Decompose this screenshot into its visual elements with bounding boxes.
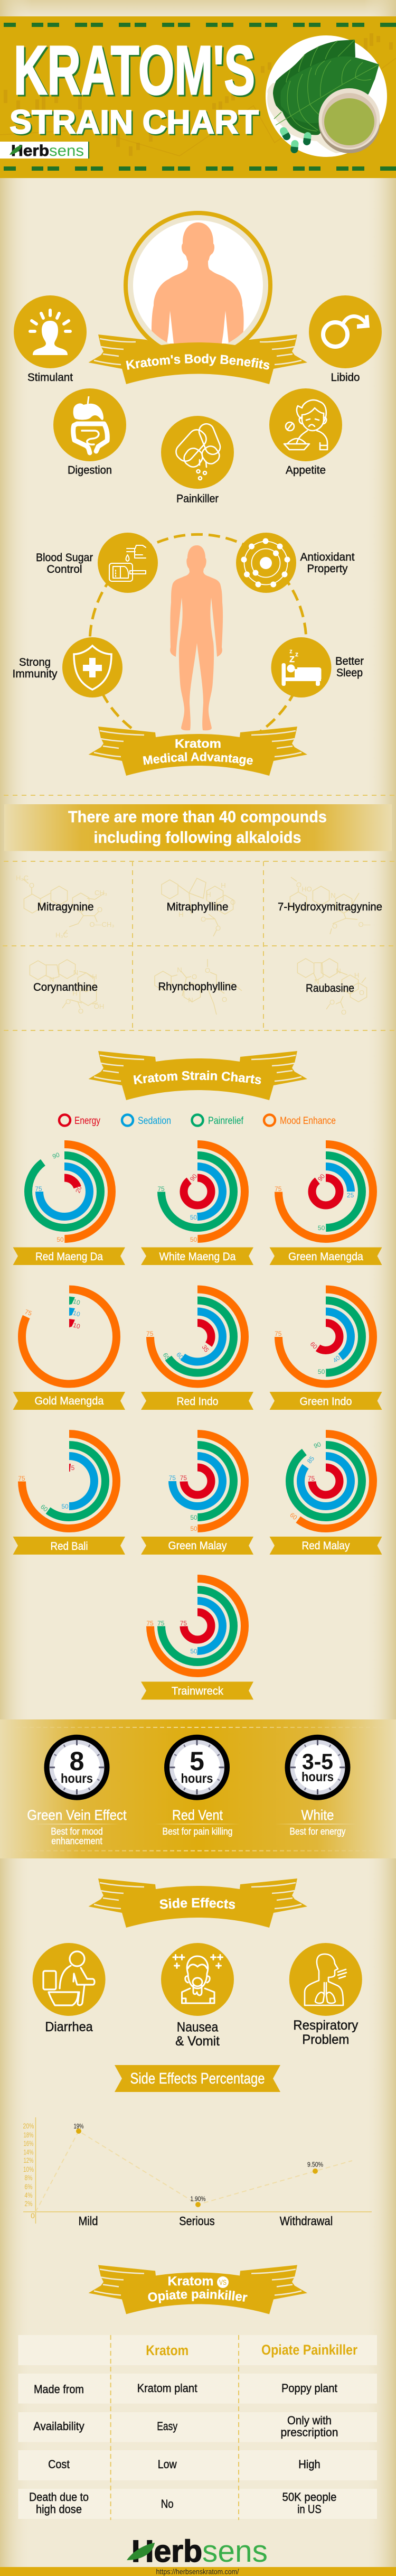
y axis labels: 10% [23,2165,34,2173]
alkaloid: 7-Hydroxymitragynine: HO [301,885,312,893]
strain label [269,1392,382,1410]
row: death due to high dose: in US [297,2503,322,2516]
clock: 5 hours [167,1737,227,1798]
y axis labels [23,2122,35,2220]
logo: Herbsens footer [127,2534,268,2569]
alkaloid: Mitragynine: Mitragynine [37,901,94,913]
leaf veins [274,40,379,131]
ribbon: Kratom Medical Advantage [89,727,307,776]
x categories: Withdrawal [280,2214,333,2228]
strain label: White Maeng Da [159,1251,236,1263]
ribbon: Kratom's Body Benefits [89,334,307,384]
table header [146,2342,357,2358]
ribbon: Kratom's Body Benefits: Kratom's Body Benefits [126,354,269,370]
alkaloid: Mitragynine: O—CH₃ [89,920,115,928]
clock: 8 hours: hours [61,1771,93,1786]
advantage: better sleep: Z [290,649,293,654]
y axis labels: 14% [23,2147,34,2156]
row: made from [34,2382,337,2396]
alkaloid: Rhynchophylline: N [177,966,182,974]
powder bowl [319,92,380,153]
side effect: respiratory problem [289,1943,362,2047]
chart: Red Bali: 60 [39,1503,50,1513]
legend: mood enhance: Mood Enhance [280,1115,336,1127]
decorative candlestick chart [4,33,393,156]
chart: Red Maeng Da: 50 [56,1236,64,1243]
data line [36,2131,352,2212]
chart: White Maeng Da: 90 [188,1173,199,1183]
alkaloid: Corynanthine: N [49,975,54,983]
benefit: appetite [269,388,342,477]
chart: White Maeng Da: 50 [190,1214,197,1221]
chart: Red Maeng Da: 90 [51,1151,61,1160]
strain label: Green Maengda [288,1251,363,1263]
alkaloid: 7-Hydroxymitragynine: O— [358,920,371,928]
oval portrait with silhouette [126,213,270,358]
logo: Herbsens header: sens [49,142,84,160]
chart: White Maeng Da: 75 [157,1185,165,1193]
chart: Green Indo: 50 [318,1368,325,1375]
y axis labels: 20% [23,2122,34,2130]
comparison table [18,2335,377,2520]
chart: Green Malay: 50 [190,1525,197,1532]
chart: Red Bali: 75 [18,1475,25,1482]
row: made from: Made from [34,2383,84,2396]
banner: compounds heading: including following alkaloids [94,828,301,847]
alkaloid: Corynanthine: O [78,1007,83,1015]
benefit: stimulant: Stimulant [27,371,73,384]
strain label: Red Malay [302,1540,350,1552]
back leaf [273,40,355,113]
chart: Green Indo: 40 [332,1354,342,1364]
row: death due to high dose: high dose [36,2503,82,2516]
panel: medical advantage [13,533,364,776]
panel: side effects [33,1878,362,2049]
alkaloid: Corynanthine: N [73,969,78,977]
legend: painrelief [192,1115,244,1127]
chart: Red Indo: 75 [146,1330,154,1337]
ribbon: Kratom Strain Charts: Kratom Strain Charts [133,1071,261,1084]
chart: Green Indo: 60 [309,1340,319,1351]
side effect: diarrhea [33,1943,106,2034]
dashed ring [90,534,306,731]
strain label [13,1392,125,1410]
y axis labels: 2% [24,2199,33,2208]
front leaf [280,57,379,135]
chart: Green Malay: 75 [169,1474,176,1482]
alkaloid: Corynanthine: H [92,973,97,981]
alkaloid: Corynanthine: O [65,998,71,1006]
ribbon: Kratom Strain Charts [89,1051,307,1100]
alkaloid: 7-Hydroxymitragynine [278,877,382,934]
alkaloid: Mitraphylline: Mitraphylline [167,901,228,913]
clock: 3-5 hours: hours [301,1770,334,1784]
title: STRAIN CHART [11,105,260,142]
footer bar with url: https://herbsenskratom.com/ [156,2567,239,2575]
strain label: Red Maeng Da [35,1251,103,1263]
side effect: nausea and vomit [161,1943,234,2049]
row: death due to high dose [29,2490,337,2516]
ribbon: Kratom Medical Advantage: Medical Advantage [143,752,253,766]
y axis labels: 0 [31,2211,35,2220]
data labels: 9.50% [307,2160,323,2169]
alkaloid: Mitraphylline: H [221,881,226,889]
chart: Trainwreck: 75 [146,1620,154,1627]
alkaloid: Raubasine: N [336,967,341,975]
strain label: Red Indo [176,1396,219,1408]
alkaloid: Rhynchophylline: Rhynchophylline [158,981,237,993]
benefit: libido: Libido [331,371,360,384]
strain label: Green Malay [168,1540,227,1552]
strain label [269,1537,382,1555]
banner: Side Effects Percentage [115,2065,280,2092]
chart: Gold Maengda [13,1289,125,1410]
pills [278,126,312,154]
clock: 8 hours: 8 [70,1746,84,1776]
strain duration: green vein [27,1807,127,1846]
alkaloid: Mitraphylline: O [201,915,206,923]
chart: Gold Maengda: 10 [72,1322,81,1331]
chart: Green Malay: 75 [180,1474,187,1482]
alkaloid: Mitragynine [16,874,115,939]
advantage: blood sugar control: Blood Sugar [36,552,93,564]
clock: 5 hours: hours [181,1771,213,1786]
alkaloid: Raubasine: H [354,971,359,979]
table header: Kratom [146,2342,188,2358]
chart: Red Malay: 90 [313,1440,322,1450]
legend: mood enhance [264,1115,336,1127]
strain duration: green vein: Green Vein Effect [27,1807,127,1823]
logo: Herbsens footer: sens [202,2534,268,2569]
side effect: respiratory problem: Problem [302,2032,349,2047]
y axis labels: 6% [24,2182,33,2191]
axes [23,2117,372,2224]
y axis labels: 18% [23,2131,34,2139]
decorative green dashes [4,25,396,169]
y axis labels: 8% [24,2173,33,2182]
alkaloid: Mitragynine: O [29,881,34,889]
chart: Trainwreck: 75 [180,1620,187,1627]
alkaloid: Rhynchophylline [155,959,242,1015]
alkaloid: Corynanthine [30,960,104,1015]
data labels: 1.90% [190,2195,206,2202]
clock: 8 hours [46,1737,107,1798]
strain duration: red vein [155,1807,240,1837]
footer bar with url [0,2567,396,2576]
strain label: Trainwreck [172,1685,223,1697]
row: cost: Low [158,2458,177,2471]
side effect: respiratory problem: Respiratory [293,2018,359,2033]
benefit: digestion: Digestion [68,464,112,477]
chart: Red Indo [141,1289,253,1410]
row: death due to high dose: 50K people [282,2490,337,2504]
advantage: strong immunity [13,637,122,698]
y axis labels: 4% [24,2191,33,2199]
chart: Red Malay [269,1434,382,1555]
alkaloid: Mitraphylline: H [206,890,211,898]
human figure [170,545,223,730]
alkaloid: Raubasine: N [314,978,319,985]
table header: Opiate Painkiller [261,2342,357,2358]
alkaloid: Corynanthine: OH [94,1002,104,1010]
legend: sedation [122,1115,171,1127]
ribbon: Kratom vs Opiate painkiller: Kratom [168,2274,213,2289]
ribbon: Side Effects [89,1878,307,1928]
title: STRAIN CHART [10,104,259,141]
line chart: side effects percentage [23,2117,372,2228]
alkaloid: Corynanthine: Corynanthine [33,981,98,993]
advantage: strong immunity: Immunity [13,668,58,680]
row: availability [33,2414,338,2439]
alkaloid: Mitragynine: O [97,906,102,914]
alkaloid: Raubasine: Raubasine [306,982,354,994]
clock: 3-5 hours [287,1737,347,1798]
chart: Gold Maengda: 10 [72,1309,81,1318]
ribbon: Kratom vs Opiate painkiller: VS [219,2278,227,2286]
x categories: Mild [78,2214,98,2228]
ribbon: Kratom Medical Advantage: Kratom [175,737,221,750]
strain label [141,1247,253,1265]
benefit: painkiller: Painkiller [176,492,219,505]
legend: sedation: Sedation [138,1115,171,1127]
chart: Green Malay: 50 [190,1514,197,1521]
chart: Green Maengda: 50 [318,1224,325,1232]
chart: Trainwreck: 50 [190,1648,197,1655]
alkaloid: Mitraphylline [162,878,235,936]
advantage: better sleep [271,637,364,698]
alkaloid: 7-Hydroxymitragynine: O [296,881,301,889]
side effect: nausea and vomit: Nausea [177,2020,218,2034]
strain duration: red vein: Best for pain killing [163,1826,232,1837]
alkaloid: Mitraphylline: O [215,924,221,932]
chart: Green Maengda: 90 [316,1173,326,1183]
alkaloid: Raubasine: O [341,1008,346,1016]
row: made from: Kratom plant [137,2382,197,2395]
data labels [74,2122,323,2202]
alkaloid: Mitragynine: H₃C [16,874,29,882]
chart: Red Malay: 60 [288,1511,299,1521]
chart: White Maeng Da [141,1145,253,1265]
chart: Green Maengda: 75 [275,1185,282,1193]
side effect: diarrhea: Diarrhea [45,2020,93,2034]
alkaloid: Rhynchophylline: N [188,996,193,1004]
chart: Red Maeng Da: 20 [74,1185,83,1194]
row: availability: prescription [281,2425,338,2439]
row: made from: Poppy plant [281,2382,337,2395]
decorative dashed rule [4,795,396,796]
alkaloid: Raubasine [297,959,367,1016]
banner: compounds heading [4,804,392,851]
title [10,31,260,142]
alkaloid: Raubasine: O [359,989,364,997]
chart: Green Maengda: 25 [347,1192,354,1199]
chart: Red Bali: 50 [61,1503,69,1510]
row: availability: Availability [33,2420,84,2433]
row: cost: High [298,2458,320,2471]
chart: Green Indo: 75 [275,1330,282,1337]
advantage: better sleep: Better [335,655,364,667]
advantage: antioxidant property: Property [307,563,348,575]
chart: Red Malay: 75 [308,1475,315,1482]
strain label [141,1537,253,1555]
strain label [13,1537,125,1555]
panel: duration band [0,1719,396,1858]
logo: Herbsens footer: Herb [131,2534,202,2569]
alkaloid: 7-Hydroxymitragynine: N [331,891,336,899]
strain duration: white: White [301,1807,334,1823]
alkaloid: Raubasine: O [329,998,335,1006]
chart: Red Bali: 5 [71,1464,75,1472]
chart: Red Malay: 85 [306,1455,316,1465]
illustration: kratom leaves and powder bowl [266,35,387,157]
advantage: blood sugar control [36,533,158,593]
chart: White Maeng Da: 50 [190,1236,197,1243]
ribbon: Kratom vs Opiate painkiller: Opiate painkiller [148,2289,248,2303]
chart: Red Bali [13,1434,125,1555]
alkaloid: Mitraphylline: H [178,910,184,918]
y axis labels: 12% [23,2156,34,2164]
advantage: antioxidant property: Antioxidant [300,551,355,563]
ribbon: Kratom vs Opiate painkiller [89,2265,307,2314]
chart: Green Maengda [269,1145,382,1265]
chart: Green Indo [269,1289,382,1410]
row: cost: Cost [48,2458,70,2471]
advantage: strong immunity: Strong [19,656,51,668]
advantage: better sleep: Sleep [336,667,363,679]
chart: Trainwreck: 75 [157,1620,165,1627]
data points [76,2128,318,2207]
advantage: better sleep: Z [289,655,295,664]
table row backgrounds [18,2335,377,2519]
chart: Green Malay [141,1434,253,1555]
chart: Red Indo: 35 [200,1344,211,1354]
strain duration: white: Best for energy [289,1826,345,1837]
clock: 5 hours: 5 [190,1746,204,1776]
header banner [0,16,396,178]
row: cost [48,2458,320,2471]
strain label: Gold Maengda [35,1395,104,1407]
row: availability: Only with [287,2414,332,2427]
benefit: libido [309,295,382,384]
logo: Herbsens header: Herb [11,142,49,160]
benefit: digestion [53,388,126,477]
alkaloid: 7-Hydroxymitragynine: 7-Hydroxymitragynine [278,901,382,913]
chart: Red Maeng Da [13,1145,125,1265]
chart: Red Indo: 60 [175,1351,185,1361]
alkaloid: Rhynchophylline: O [192,973,197,981]
clock: 3-5 hours: 3-5 [302,1749,333,1774]
x categories [78,2214,333,2228]
strain duration: red vein: Red Vent [172,1807,223,1823]
legend [59,1115,336,1127]
title: KRATOM'S [14,31,255,109]
strain duration: green vein: Best for mood [51,1826,103,1837]
alkaloid: 7-Hydroxymitragynine: O [332,922,337,930]
row: death due to high dose: Death due to [29,2490,89,2504]
chart: Gold Maengda: 10 [72,1298,81,1307]
chart: Red Maeng Da: 75 [35,1185,42,1193]
side effect: nausea and vomit: & Vomit [175,2034,220,2049]
strain duration: white [275,1807,356,1837]
strain label [141,1392,253,1410]
chart: Trainwreck [141,1579,253,1699]
advantage: blood sugar control: Control [46,563,82,575]
strain label [13,1247,125,1265]
legend: energy [59,1115,100,1127]
legend: energy: Energy [74,1115,100,1127]
panel: body benefits [14,211,382,505]
strain label [269,1247,382,1265]
advantage: better sleep: Z [295,652,298,657]
alkaloid: Mitragynine: CH₃ [95,889,107,897]
strain label [141,1681,253,1699]
data labels: 19% [74,2122,84,2130]
alkaloid: Rhynchophylline: O [222,996,227,1003]
logo: Herbsens header [0,142,89,160]
x categories: Serious [179,2214,215,2228]
advantage: antioxidant property [236,533,355,593]
chart: Red Indo: 65 [162,1352,172,1362]
ribbon: Side Effects: Side Effects [159,1898,235,1909]
benefit: stimulant [14,295,87,384]
strain label: Green Indo [300,1396,352,1408]
row: availability: Easy [157,2420,177,2433]
banner: Side Effects Percentage: Side Effects Percentage [130,2070,265,2087]
chart: Gold Maengda: 75 [24,1308,33,1317]
strain duration: green vein: enhancement [51,1836,102,1846]
leaf shadow [267,83,359,153]
y axis labels: 16% [23,2139,34,2147]
alkaloid: Mitraphylline: O [230,898,235,906]
alkaloid: Corynanthine: H [72,989,78,997]
title: KRATOM'S [15,33,257,110]
alkaloid: Mitragynine: H₃C [55,931,68,939]
benefit: appetite: Appetite [286,464,326,477]
strain label: Red Bali [51,1540,88,1552]
banner: compounds heading: There are more than 40 compounds [68,807,327,826]
legend: painrelief: Painrelief [208,1115,244,1127]
row: death due to high dose: No [161,2497,174,2510]
alkaloid: Rhynchophylline: O [205,966,210,974]
benefit: painkiller [161,416,234,505]
panel: alkaloid grid [3,861,396,1030]
